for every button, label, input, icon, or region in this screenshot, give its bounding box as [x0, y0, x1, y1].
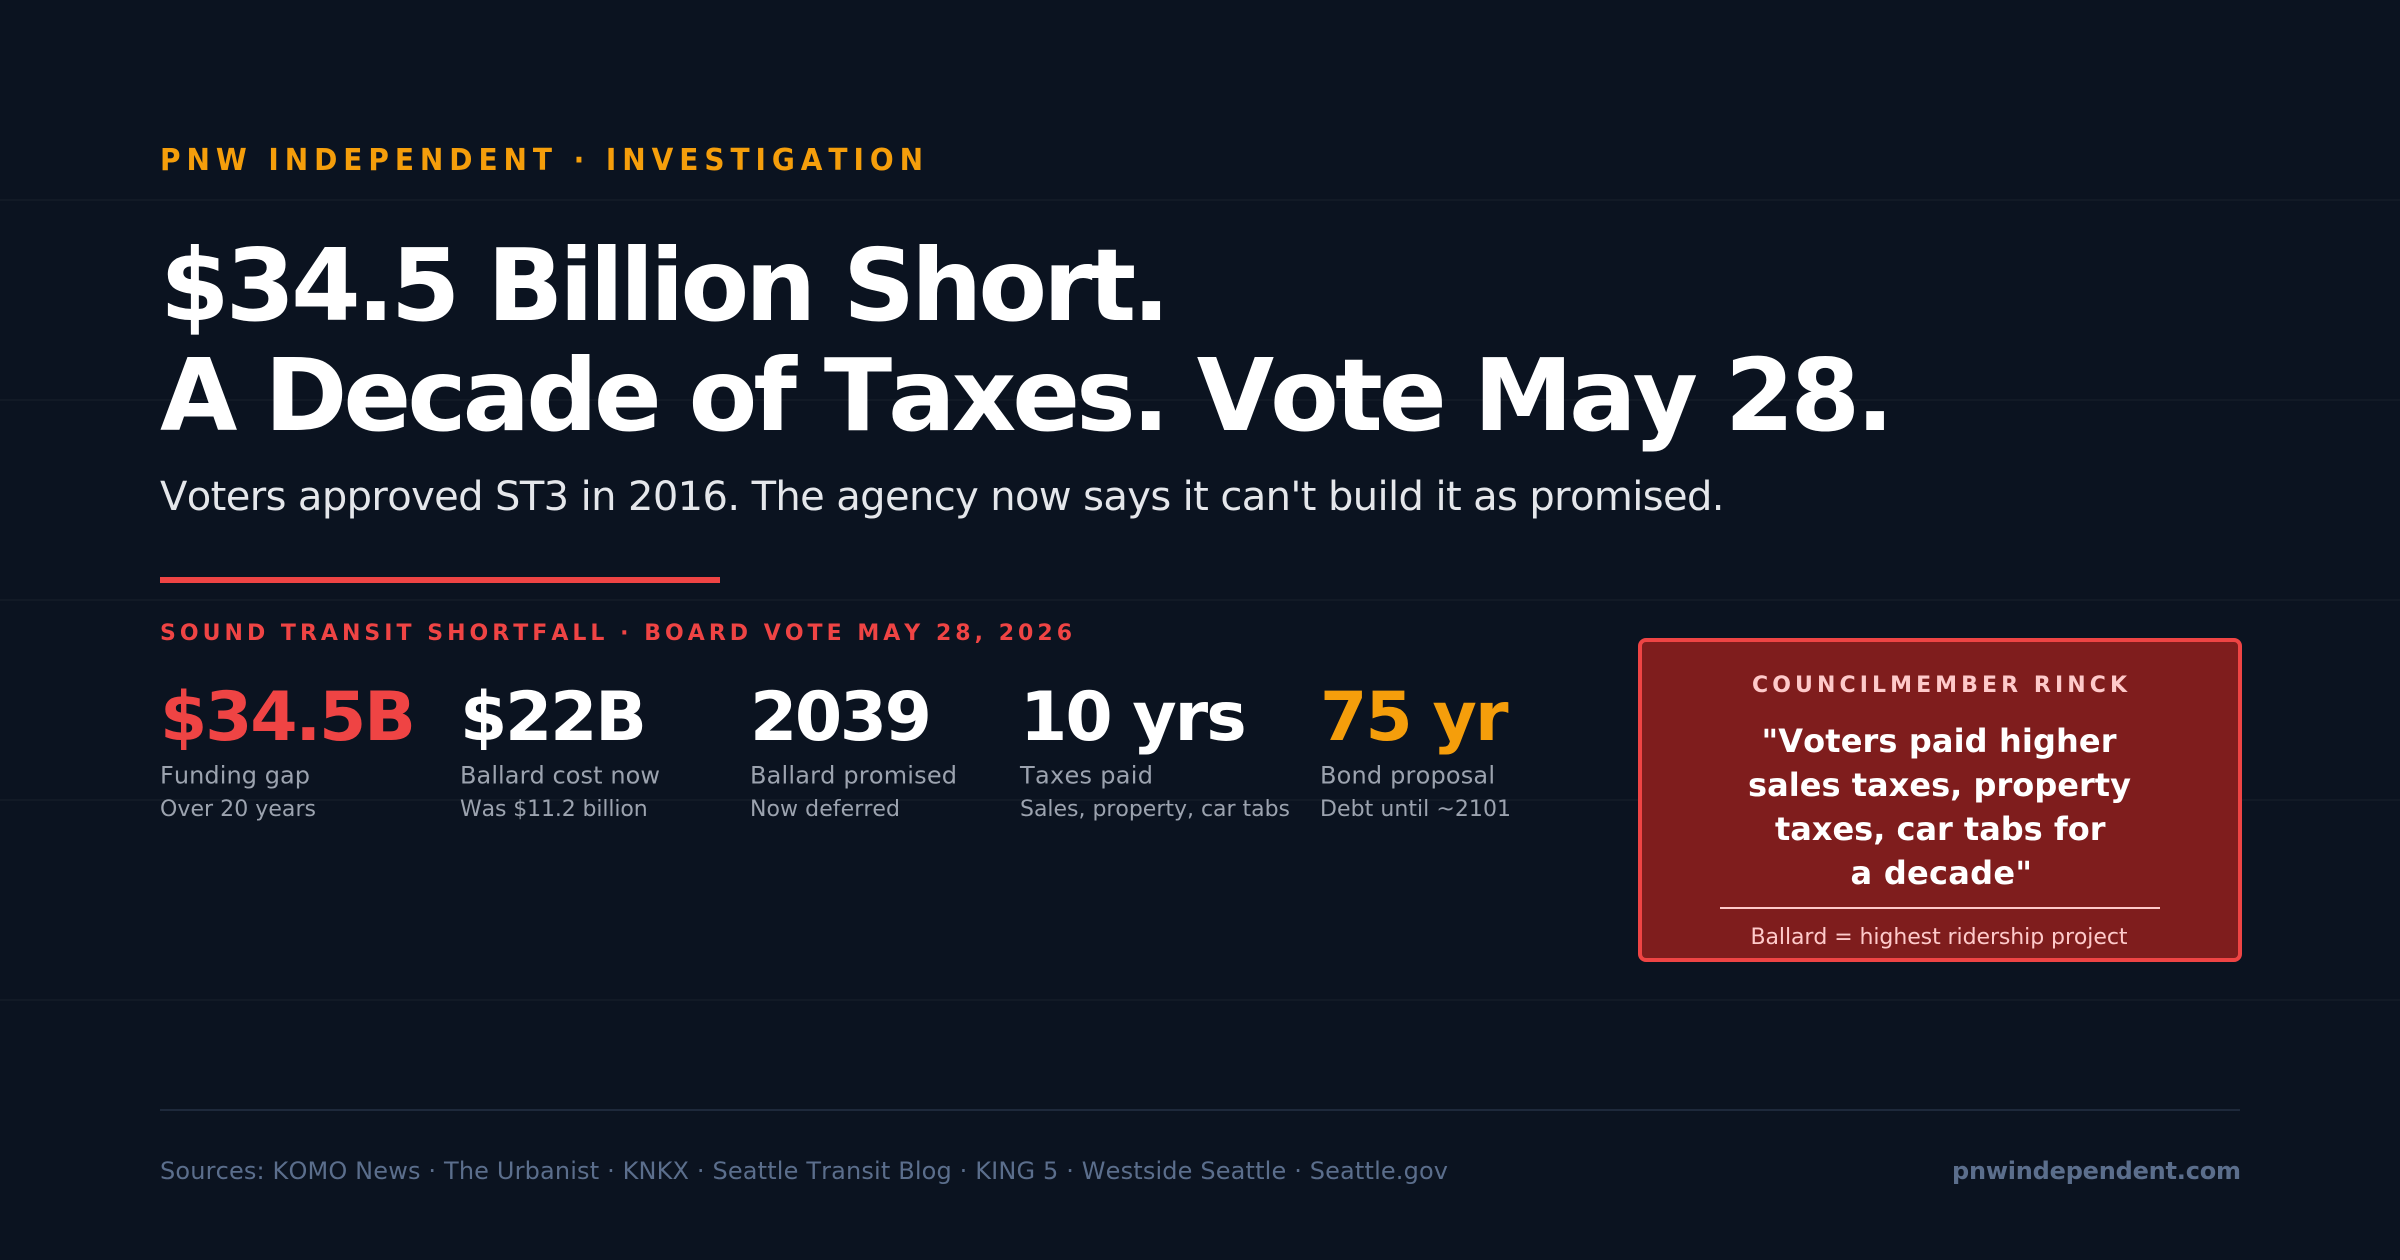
stat: funding gap: Funding gap	[160, 762, 310, 790]
card footnote: Ballard = highest ridership project	[1750, 925, 2128, 950]
quote	[1748, 722, 2131, 892]
stats row	[160, 678, 1511, 822]
site name: pnwindependent.com	[1952, 1157, 2241, 1185]
stat: taxes paid: 10 yrs	[1020, 678, 1247, 757]
eyebrow: PNW INDEPENDENT · INVESTIGATION	[160, 142, 923, 177]
stat: Ballard promised: 2039	[750, 678, 932, 757]
quote: a decade"	[1850, 854, 2032, 892]
stat: Ballard cost: $22B	[460, 678, 647, 757]
title: A Decade of Taxes. Vote May 28.	[160, 337, 1890, 454]
stat: bond proposal: Debt until ~2101	[1320, 797, 1511, 822]
stat: bond proposal: 75 yr	[1320, 678, 1509, 757]
stat: funding gap	[160, 678, 416, 822]
footer	[160, 1109, 2241, 1185]
stat: taxes paid: Sales, property, car tabs	[1020, 797, 1290, 822]
sources: Sources: KOMO News · The Urbanist · KNKX · Seattle Transit Blog · KING 5 · Westside Seattle · Seattle.gov	[160, 1157, 1448, 1185]
stat: Ballard promised	[750, 678, 957, 822]
quote: sales taxes, property	[1748, 766, 2131, 804]
title	[160, 227, 1890, 454]
title: $34.5 Billion Short.	[160, 227, 1166, 344]
stat: Ballard promised: Ballard promised	[750, 762, 957, 790]
stat: Ballard cost: Was $11.2 billion	[460, 797, 648, 822]
stat: bond proposal: Bond proposal	[1320, 762, 1495, 790]
section label: SOUND TRANSIT SHORTFALL · BOARD VOTE MAY 28, 2026	[160, 621, 1072, 646]
stat: bond proposal	[1320, 678, 1511, 822]
stat: Ballard cost: Ballard cost now	[460, 762, 660, 790]
red accent bar	[160, 577, 720, 583]
stat: Ballard promised: Now deferred	[750, 797, 900, 822]
quote: "Voters paid higher	[1762, 722, 2117, 760]
quote: taxes, car tabs for	[1775, 810, 2106, 848]
stat: taxes paid	[1019, 678, 1290, 822]
card heading: COUNCILMEMBER RINCK	[1752, 673, 2128, 698]
stat: Ballard cost	[460, 678, 660, 822]
stat: taxes paid: Taxes paid	[1019, 762, 1153, 790]
subtitle: Voters approved ST3 in 2016. The agency now says it can't build it as promised.	[160, 474, 1724, 520]
panel: councilmember quote card	[1640, 640, 2240, 960]
stat: funding gap: Over 20 years	[160, 797, 316, 822]
stat: funding gap: $34.5B	[160, 678, 416, 757]
